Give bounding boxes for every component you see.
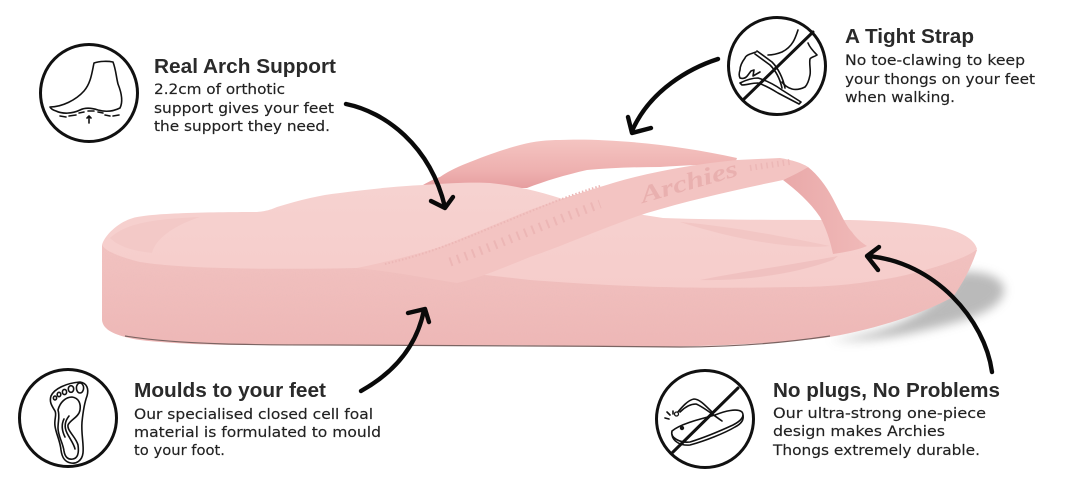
sole bottom edge [125,336,830,347]
strap brand emboss: Archies [635,156,741,209]
body text: support gives your feet [154,101,335,117]
forefoot shading upper [680,222,830,247]
heading: Moulds to your feet [134,380,326,402]
front strap band [357,158,808,283]
feature: moulds to your feet [20,370,381,466]
strap tip ridges [750,162,790,168]
heading: No plugs, No Problems [773,380,1000,402]
feature: no plugs, no problems [656,370,1000,468]
body text: your thongs on your feet [845,72,1036,88]
body text [772,406,986,459]
icon: clawing foot crossed out [728,18,826,114]
sole texture [102,240,977,347]
sandal [102,140,1004,347]
body text: when walking. [845,90,955,106]
heel texture [110,217,200,253]
heading: A Tight Strap [845,26,974,48]
body text [134,407,381,459]
body text [154,82,335,135]
icon: broken plug thong crossed out [656,370,754,468]
icon: footprint [20,370,116,466]
body text: the support they need. [154,119,330,135]
body text: No toe-clawing to keep [845,53,1025,69]
arrow: arch support [346,104,453,208]
strap ridge pattern [450,204,600,262]
body text: Our ultra-strong one-piece [773,406,986,422]
body text: material is formulated to mould [134,425,381,441]
arrow: no plugs [867,247,992,372]
body text [845,53,1036,106]
arrow: tight strap [628,59,718,133]
toe post [783,167,867,254]
heading: Real Arch Support [154,56,336,78]
body text: Our specialised closed cell foal [134,407,373,423]
sole side wall [102,240,977,347]
ground shadow [830,272,1004,341]
icon: foot with arch [40,44,138,142]
body text: to your foot. [134,443,225,459]
body text: design makes Archies [773,424,945,440]
footbed top surface [102,183,977,288]
forefoot shading [700,256,838,280]
feature: a tight strap [728,18,1036,114]
feature: real arch support [40,44,336,142]
back strap [423,140,737,188]
arrow: moulds [361,309,429,391]
body text: 2.2cm of orthotic [154,82,285,98]
strap stitching [385,186,600,264]
body text: Thongs extremely durable. [772,443,980,459]
